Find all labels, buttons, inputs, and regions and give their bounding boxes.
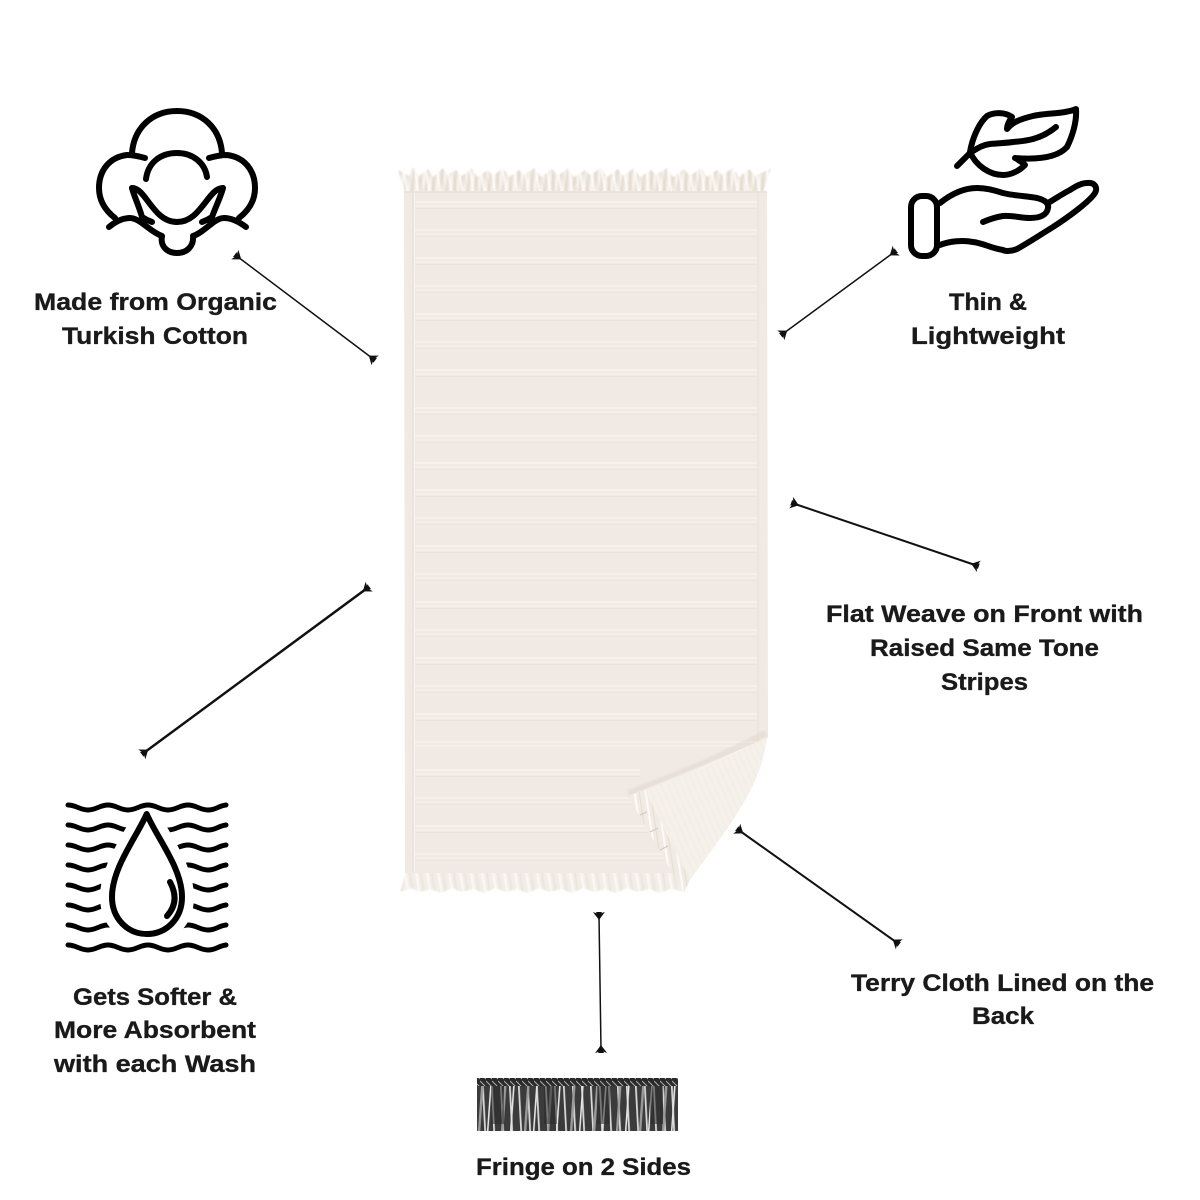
arrow: fringe [599,916,601,1049]
icon: fringe swatch [477,1078,678,1131]
label: organic cotton: Made from Organic [34,289,277,316]
label: thin and lightweight: Lightweight [911,323,1065,350]
arrow: flat weave [795,504,975,565]
label: flat weave: Stripes [941,669,1028,696]
arrow: terry [740,831,896,942]
label: terry cloth [851,970,1154,1030]
label: terry cloth: Terry Cloth Lined on the [851,970,1154,997]
folded corner [628,733,767,892]
towel [398,167,771,893]
arrow: cotton [238,257,372,358]
label: fringe: Fringe on 2 Sides [476,1154,691,1181]
bottom fringe [400,871,686,893]
label: flat weave: Flat Weave on Front with [826,601,1143,628]
label: thin and lightweight: Thin & [949,289,1027,316]
label: organic cotton: Turkish Cotton [62,323,248,350]
icon: cotton [99,111,255,253]
label: softer and absorbent: with each Wash [53,1051,256,1078]
towel front [404,191,768,873]
icon: feather and hand [911,109,1096,256]
arrow: softer [145,589,366,752]
arrow: lightweight [784,253,893,333]
icon: water drop and waves [68,805,226,950]
label: thin and lightweight [911,289,1065,350]
label: flat weave [826,601,1143,696]
label: flat weave: Raised Same Tone [870,635,1099,662]
label: softer and absorbent [53,984,256,1078]
label: softer and absorbent: More Absorbent [54,1017,256,1044]
label: softer and absorbent: Gets Softer & [73,984,237,1011]
label: terry cloth: Back [972,1003,1035,1030]
label: organic cotton [34,289,277,350]
top fringe [398,167,771,192]
